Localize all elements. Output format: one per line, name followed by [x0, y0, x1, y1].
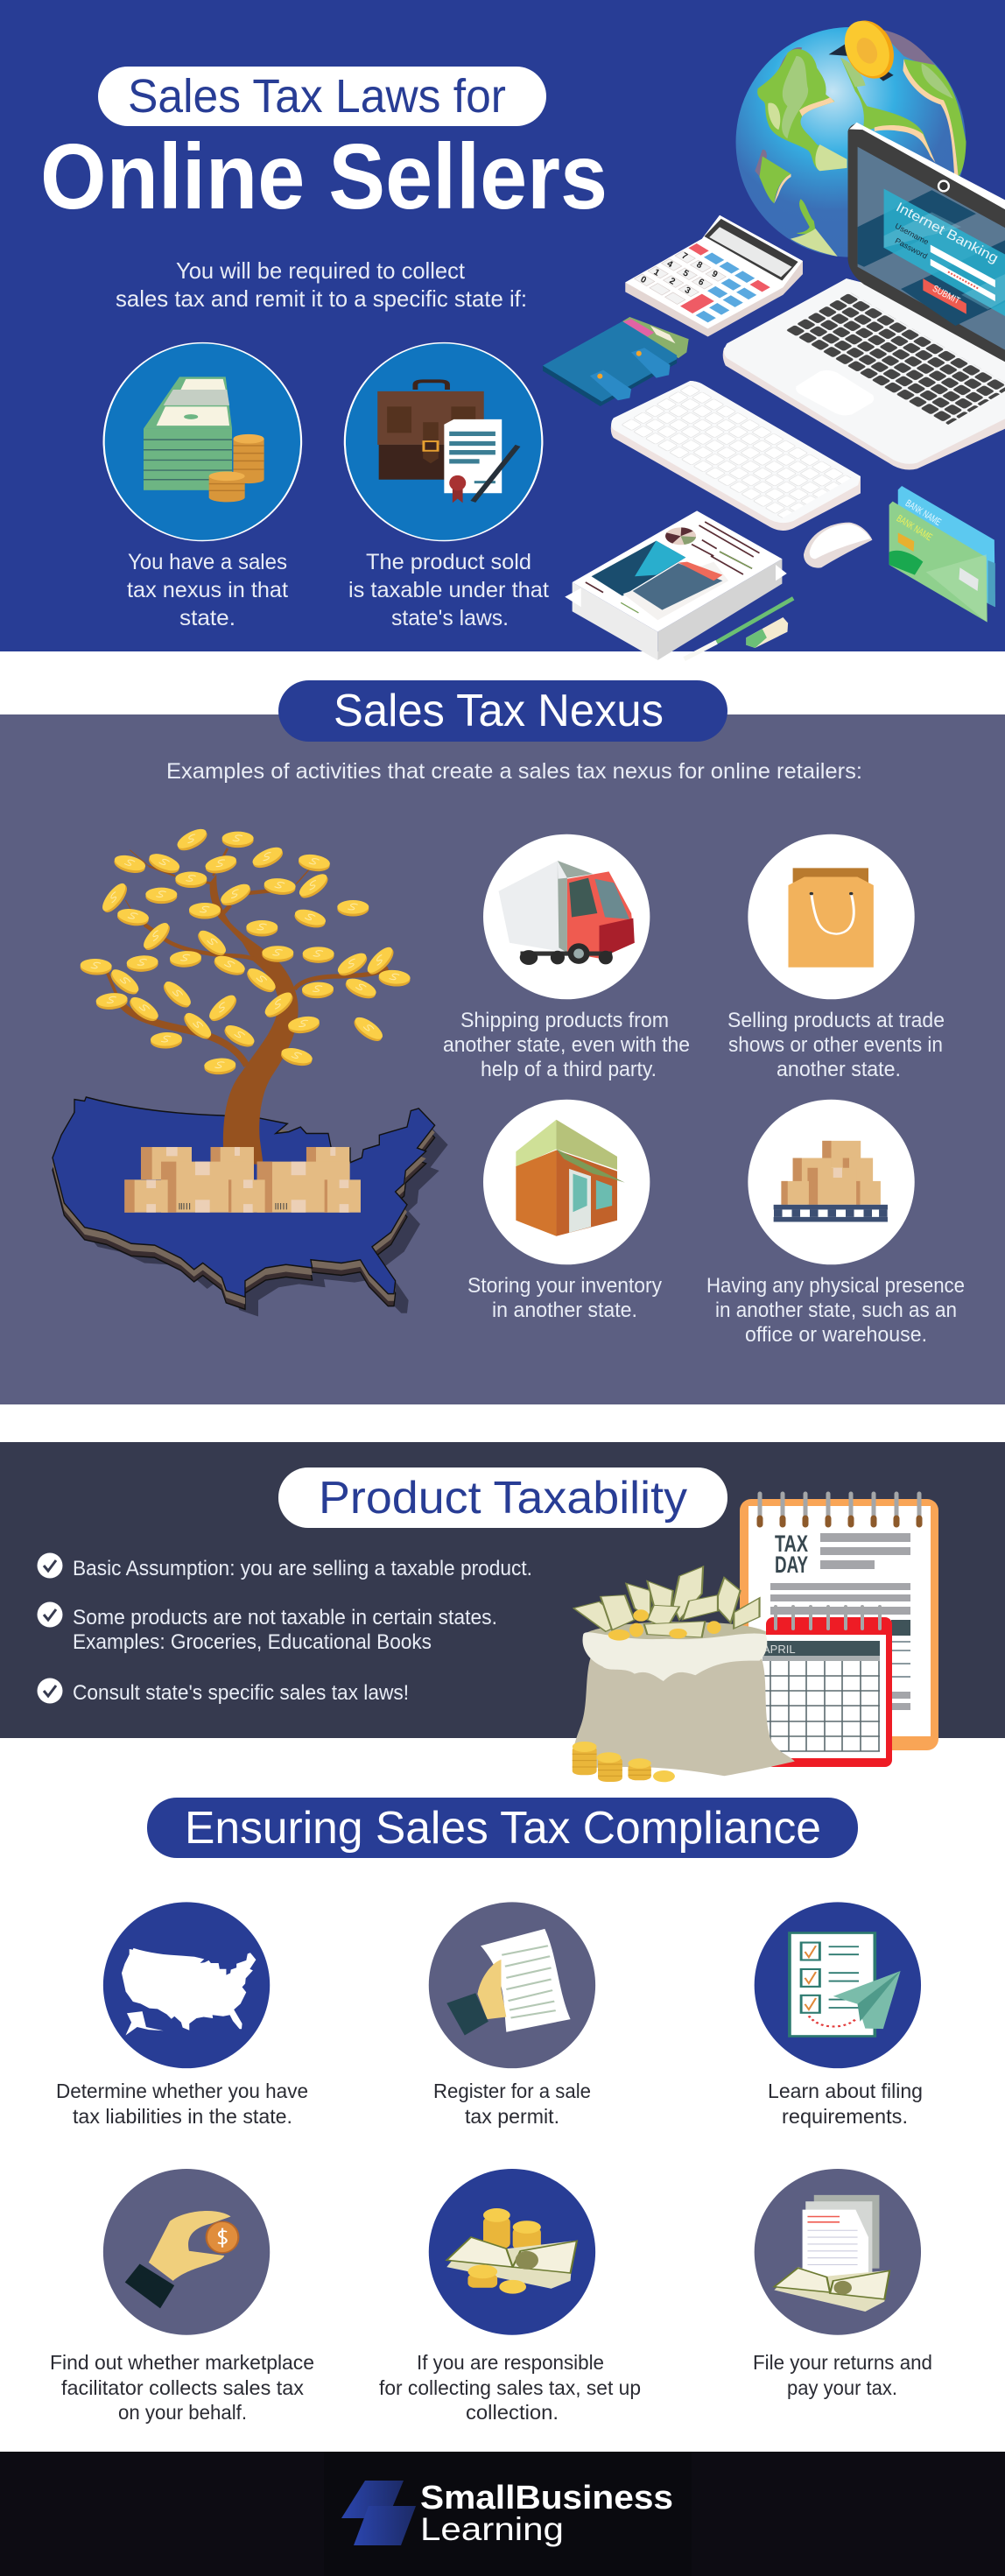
text: collection caption	[379, 2351, 641, 2424]
logo: Small Business Learning	[341, 2480, 673, 2547]
title: Online Sellers: Online Sellers	[40, 125, 608, 229]
text: hero intro: You will be required to collect	[176, 257, 466, 284]
illustration: bank cards: BANK NAME	[895, 513, 934, 543]
illustration: laptop: Username	[894, 222, 931, 247]
text: marketplace facilitator caption: facilitator collects sales tax	[61, 2376, 304, 2399]
panel: footer background	[0, 2452, 1005, 2576]
illustration: calculator: 5	[681, 268, 691, 279]
illustration: money bag with coins	[573, 1566, 795, 1782]
text: collection caption: If you are responsible	[417, 2351, 604, 2374]
heading pill: Ensuring Sales Tax Compliance: Ensuring Sales Tax Compliance	[185, 1803, 821, 1854]
text: physical presence caption	[706, 1274, 965, 1347]
text: marketplace facilitator caption: on your behalf.	[118, 2401, 247, 2424]
text: storing inventory caption: Storing your inventory	[467, 1274, 662, 1298]
logo: Small Business Learning: Learning	[420, 2511, 564, 2547]
illustration: wallet	[543, 317, 689, 406]
illustration: calculator	[625, 215, 803, 337]
text: file returns caption	[753, 2351, 932, 2399]
illustration: calculator: 3	[683, 285, 692, 296]
bullet: consult laws: Consult state's specific sales tax laws!	[73, 1681, 409, 1705]
text: physical presence caption: in another state, such as an	[715, 1299, 957, 1322]
panel: hero background	[0, 0, 1005, 651]
text: filing caption	[768, 2080, 923, 2128]
illustration: red calendar: APRIL	[763, 1643, 796, 1656]
heading pill: Sales Tax Nexus	[278, 680, 727, 742]
icon: storefront	[483, 1100, 650, 1264]
text: physical presence caption: office or warehouse.	[745, 1323, 927, 1347]
illustration: calculator: 1	[652, 267, 661, 278]
heading pill: Sales Tax Nexus: Sales Tax Nexus	[334, 686, 664, 736]
illustration: USA map base	[53, 1097, 448, 1317]
illustration: calculator: 8	[694, 260, 704, 271]
text: caption taxable product: The product sold	[366, 550, 531, 574]
illustration: calculator: 0	[638, 275, 648, 285]
text: nexus intro: Examples of activities that create a sales tax nexus for online retailers:	[166, 759, 862, 784]
title pill: Sales Tax Laws for: Sales Tax Laws for	[128, 70, 506, 123]
text: hero intro: sales tax and remit it to a specific state if:	[116, 285, 527, 312]
text: file returns caption: File your returns and	[753, 2351, 932, 2374]
illustration: cardboard boxes on map	[124, 1147, 361, 1213]
heading pill: Product Taxability: Product Taxability	[319, 1473, 687, 1524]
illustration: tax day notepad: TAX	[775, 1531, 808, 1557]
icon: boxes on pallet	[748, 1100, 915, 1264]
text: shipping caption: Shipping products from	[460, 1009, 669, 1032]
illustration: calculator: 6	[696, 278, 706, 288]
text: storing inventory caption	[467, 1274, 662, 1322]
text: file returns caption: pay your tax.	[787, 2376, 897, 2399]
text: marketplace facilitator caption: Find out whether marketplace	[50, 2351, 314, 2374]
panel: sales tax nexus background	[0, 714, 1005, 1404]
text: trade shows caption: Selling products at trade	[727, 1009, 945, 1032]
icon: delivery truck	[483, 834, 650, 999]
bullet: non-taxable products: Some products are not taxable in certain states.	[73, 1606, 497, 1629]
text: shipping caption: another state, even with the	[443, 1033, 690, 1057]
text: storing inventory caption: in another state.	[492, 1299, 637, 1322]
text: shipping caption	[443, 1009, 690, 1081]
text: trade shows caption: another state.	[777, 1058, 901, 1081]
illustration: calculator: 2	[667, 277, 677, 287]
illustration: calculator: 4	[665, 259, 674, 271]
text: permit caption: tax permit.	[465, 2105, 559, 2128]
icon: hand holding coin	[103, 2169, 270, 2335]
text: tax liabilities caption	[56, 2080, 308, 2128]
text: collection caption: collection.	[466, 2401, 559, 2424]
text: tax liabilities caption: Determine whether you have	[56, 2080, 308, 2102]
text: caption nexus	[127, 550, 288, 630]
text: trade shows caption	[727, 1009, 945, 1081]
illustration: globe with coin	[736, 12, 966, 257]
illustration: tax day notepad	[740, 1494, 938, 1750]
text: caption taxable product: state's laws.	[391, 606, 509, 630]
illustration: calculator: 9	[710, 269, 720, 280]
illustration: bank cards: BANK NAME	[903, 498, 943, 528]
illustration: calculator: 7	[680, 251, 689, 262]
illustration: pencil and eraser	[685, 598, 793, 659]
text: filing caption: Learn about filing	[768, 2080, 923, 2102]
bullet: non-taxable products	[37, 1602, 497, 1654]
illustration: laptop: Internet Banking	[893, 200, 1001, 266]
illustration: laptop: Password	[894, 236, 929, 261]
icon: briefcase circle	[345, 343, 542, 541]
text: physical presence caption: Having any physical presence	[706, 1274, 965, 1298]
illustration: tax day notepad: DAY	[775, 1552, 808, 1578]
icon: permit document in hand	[429, 1902, 595, 2068]
heading pill: Product Taxability	[278, 1467, 727, 1528]
text: collection caption: for collecting sales tax, set up	[379, 2376, 641, 2399]
bullet: basic assumption: Basic Assumption: you are selling a taxable product.	[73, 1557, 532, 1580]
icon: money circle	[104, 343, 301, 541]
icon: cash and coins	[429, 2169, 595, 2335]
illustration: mouse	[804, 523, 872, 568]
icon: returns and cash	[755, 2169, 921, 2335]
text: permit caption: Register for a sale	[433, 2080, 591, 2102]
bullet: non-taxable products: Examples: Groceries, Educational Books	[73, 1630, 432, 1654]
text: shipping caption: help of a third party.	[481, 1058, 657, 1081]
illustration: document stack	[565, 510, 787, 660]
text: caption taxable product: is taxable under that	[348, 578, 549, 602]
text: caption taxable product	[348, 550, 549, 630]
text: marketplace facilitator caption	[50, 2351, 314, 2424]
illustration: coin tree	[80, 825, 411, 1165]
illustration: bank cards	[889, 486, 995, 623]
text: trade shows caption: shows or other events in	[728, 1033, 943, 1057]
illustration: laptop	[723, 123, 1005, 469]
illustration: white keyboard	[611, 381, 861, 531]
illustration: red calendar	[753, 1607, 892, 1767]
illustration: laptop: SUBMIT	[931, 284, 962, 306]
text: caption nexus: tax nexus in that	[127, 578, 288, 602]
text: tax liabilities caption: tax liabilities in the state.	[73, 2105, 292, 2128]
logo: Small Business Learning: SmallBusiness	[420, 2480, 673, 2516]
text: caption nexus: state.	[179, 606, 235, 630]
text: permit caption	[433, 2080, 591, 2128]
icon: white USA map	[103, 1902, 270, 2068]
text: filing caption: requirements.	[782, 2105, 908, 2128]
icon: checklist with paper plane	[755, 1902, 921, 2068]
icon: shopping bag	[748, 834, 915, 999]
text: caption nexus: You have a sales	[128, 550, 287, 574]
panel: product taxability background	[0, 1442, 1005, 1738]
text: hero intro	[116, 257, 527, 312]
